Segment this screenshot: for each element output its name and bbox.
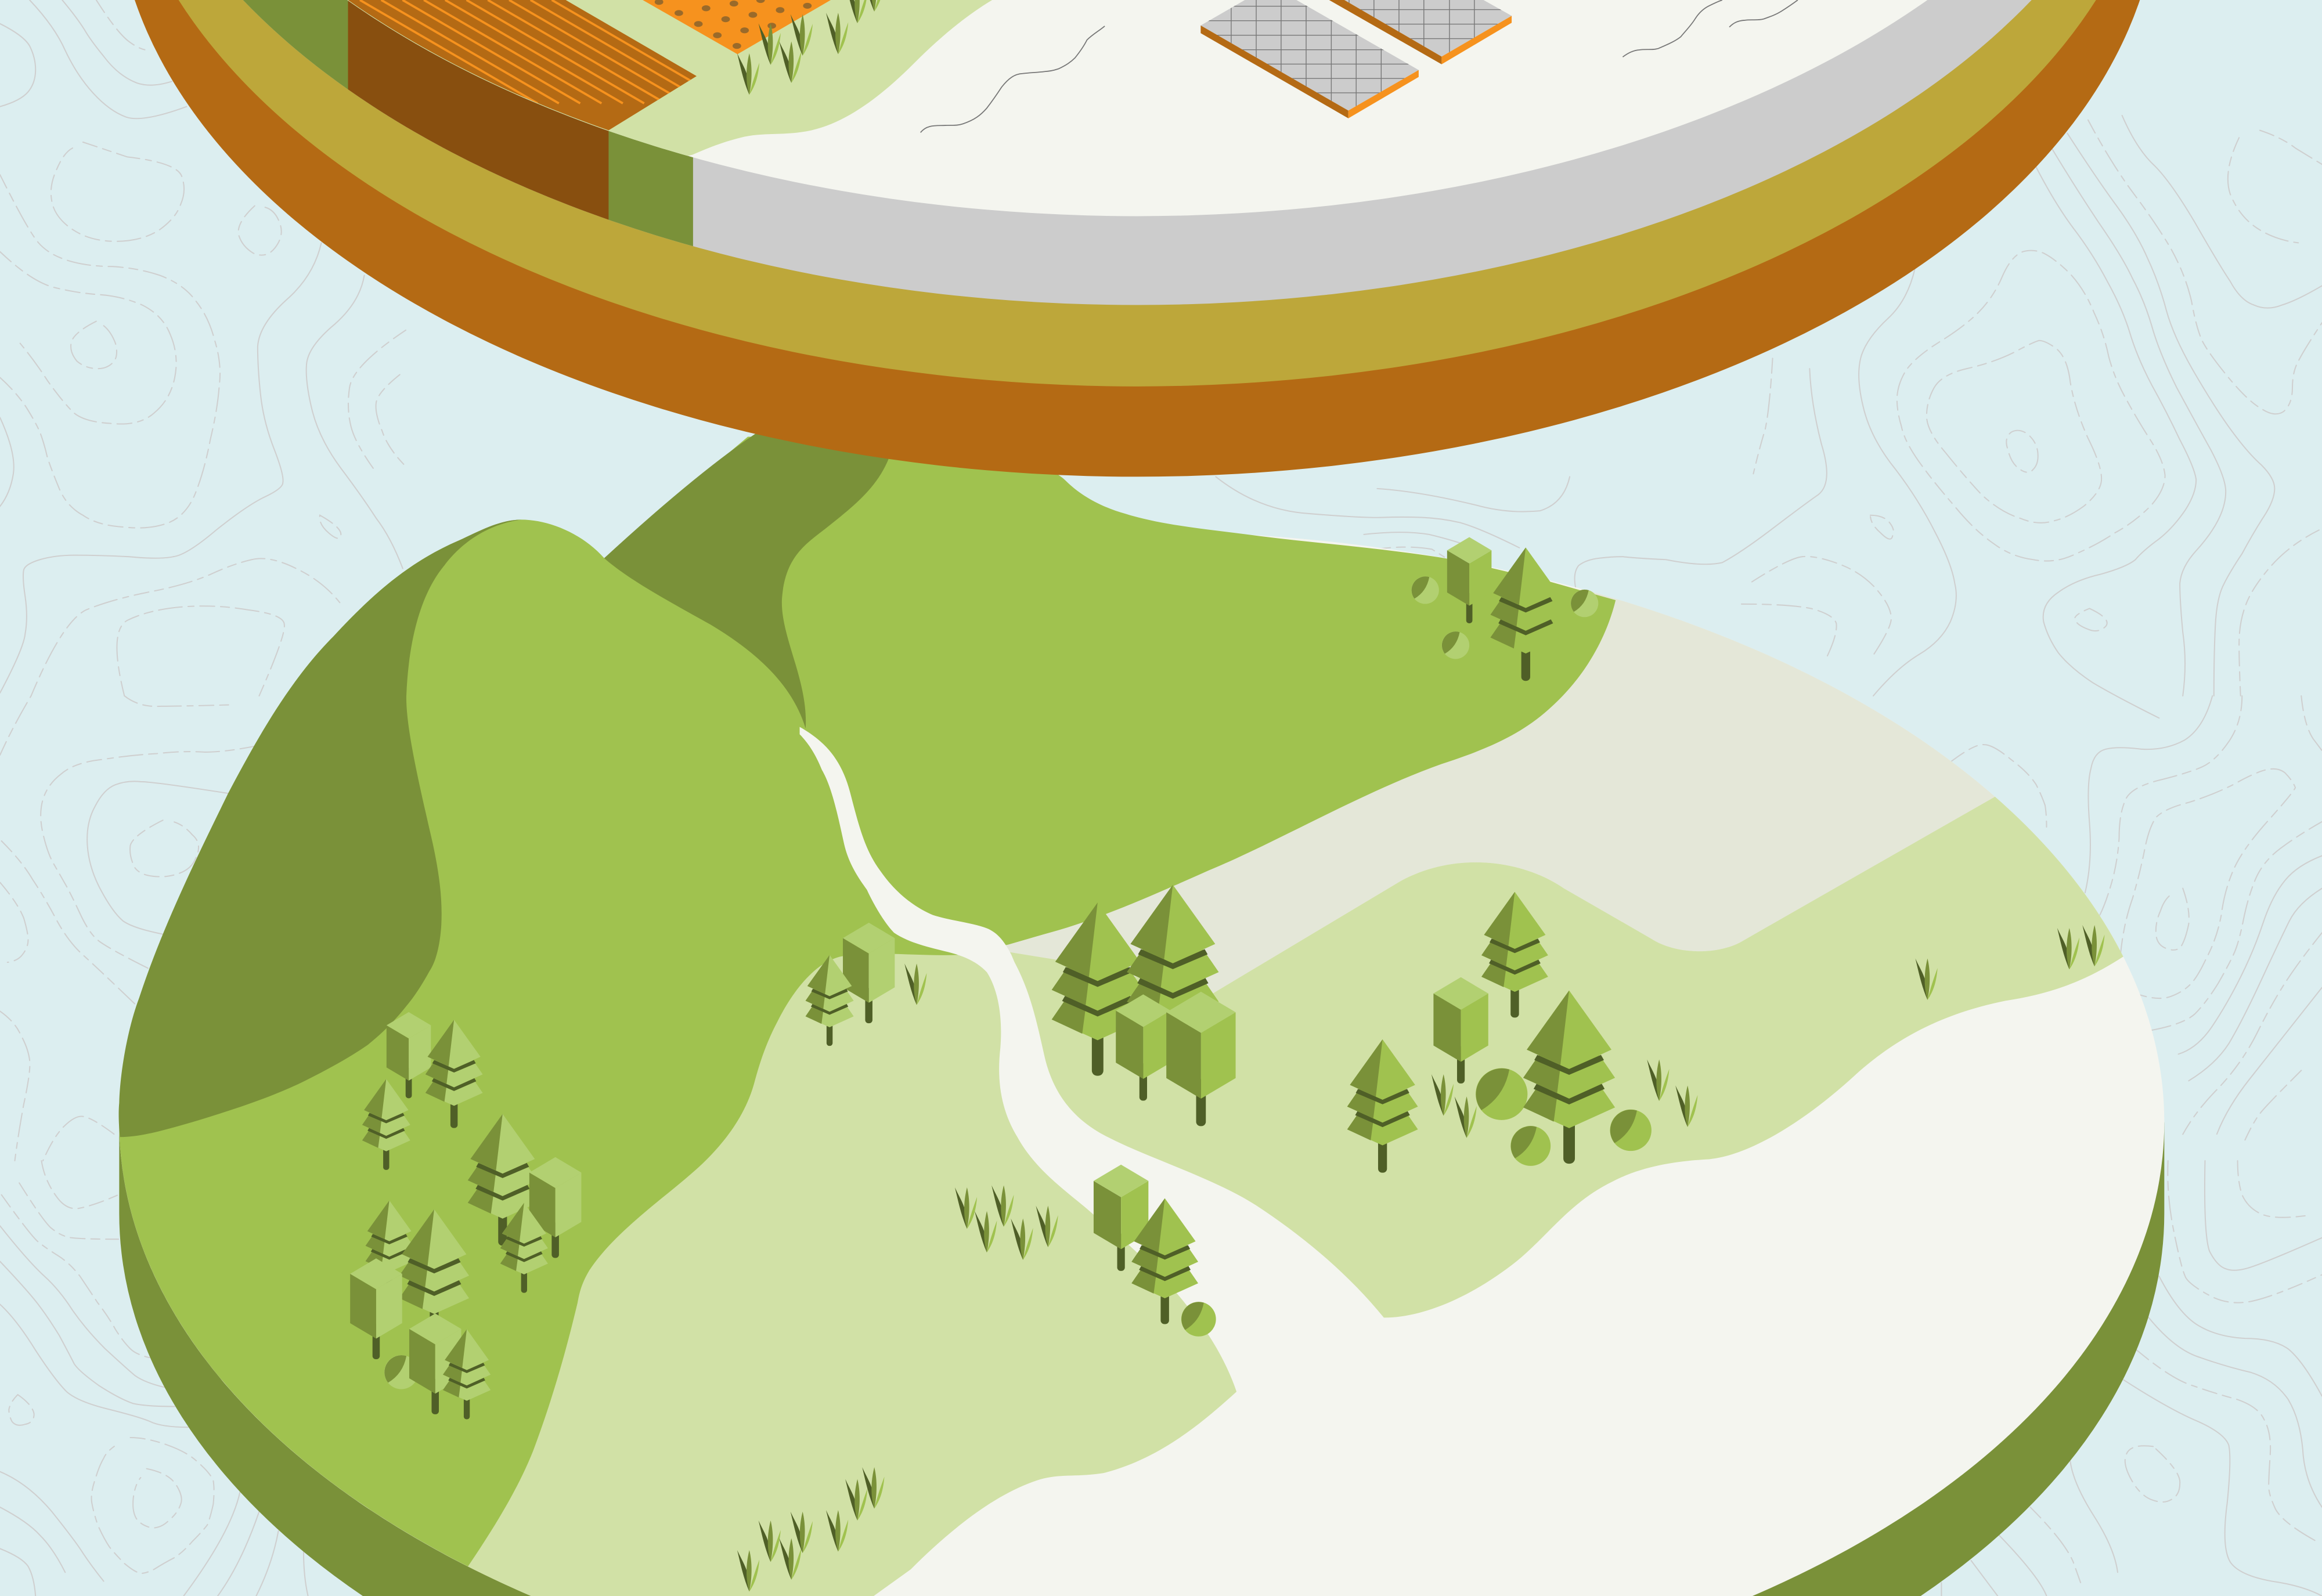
grass tufts: right edge xyxy=(1915,925,2105,1000)
tree group: lower river xyxy=(1094,1165,1216,1337)
lower disc pale surface xyxy=(119,532,2164,1596)
pale grey-green field xyxy=(1006,592,1995,994)
tree group: river bend xyxy=(806,923,926,1046)
tree group: left forest xyxy=(350,1012,581,1420)
light green meadow left xyxy=(444,948,1236,1596)
dark green left slope xyxy=(119,519,521,1137)
tree group: centre cluster xyxy=(1052,884,1236,1126)
light green meadow right xyxy=(1010,796,2123,1317)
mid green hills xyxy=(119,437,1616,1566)
upper disc cut wall: green and brown soil sections xyxy=(243,0,693,246)
solar panel front xyxy=(1200,0,1419,118)
tree group: far right hilltop xyxy=(1411,537,1598,681)
tree group: right meadow xyxy=(1347,892,1697,1173)
lower disc side wall xyxy=(119,1122,2164,1596)
squiggle lines on white surface xyxy=(921,0,1798,132)
grass tufts: lower meadow xyxy=(737,1185,1058,1591)
upper disc white surface xyxy=(116,0,2159,216)
upper disc brown base layer xyxy=(116,0,2159,476)
dotted crop field xyxy=(643,0,831,54)
river xyxy=(800,727,1023,1019)
upper disc grey wall xyxy=(116,0,2159,305)
upper disc gold layer xyxy=(116,0,2159,387)
solar panel back xyxy=(1329,0,1512,64)
panel: upper farmland disc xyxy=(0,0,2159,476)
grass tufts: upper band xyxy=(737,0,884,95)
light green farm band xyxy=(347,0,992,156)
panel: lower hillside disc xyxy=(119,434,2222,1596)
dark green valley xyxy=(604,434,889,728)
striped crop field xyxy=(348,0,730,130)
